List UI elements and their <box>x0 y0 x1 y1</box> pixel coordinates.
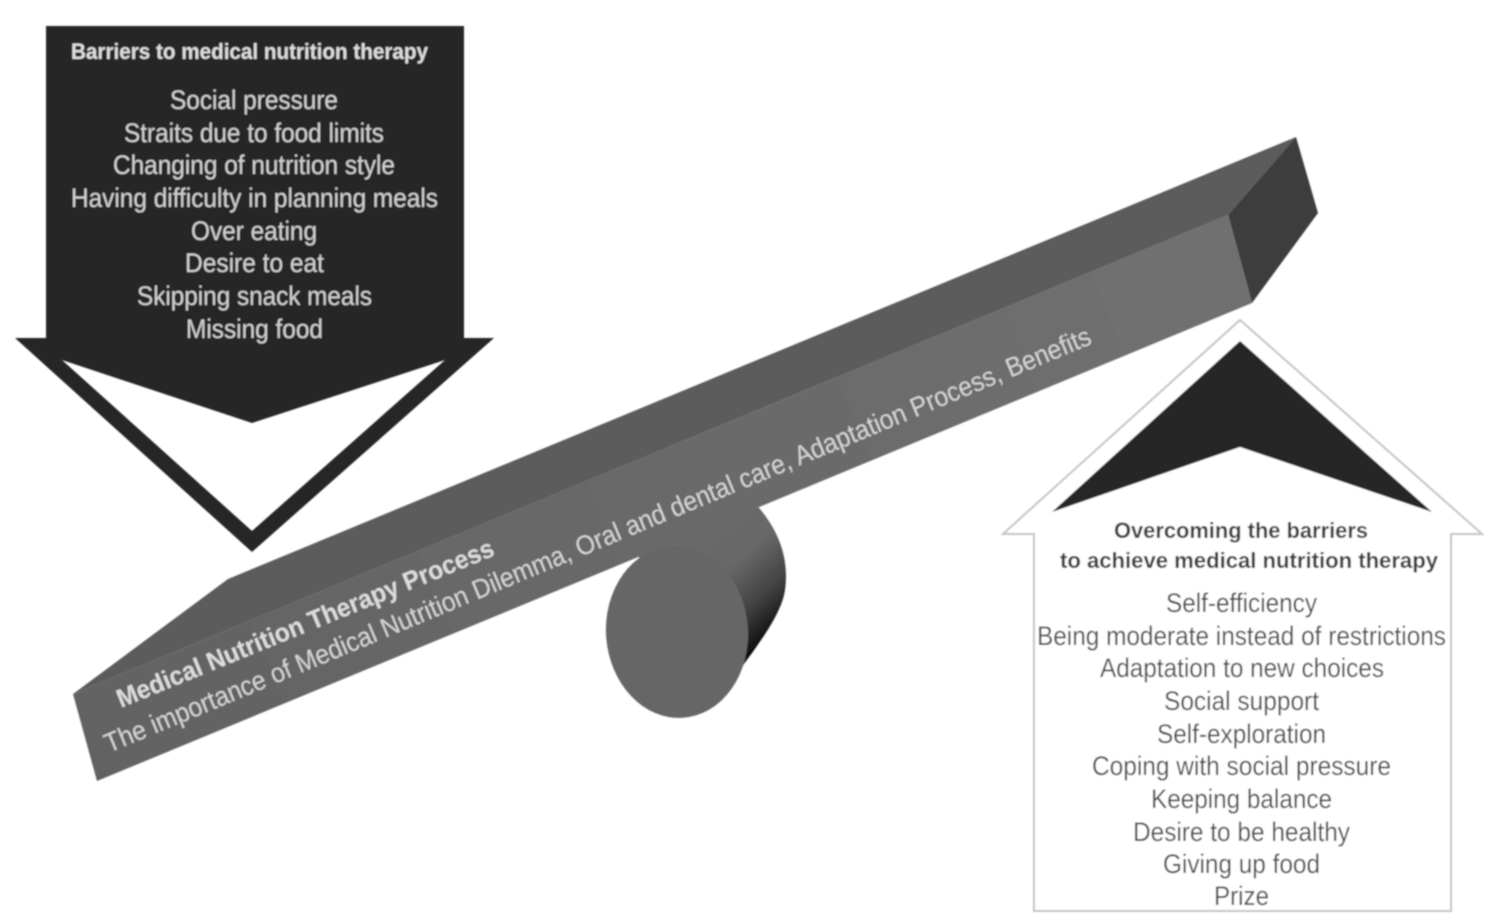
list: barriers: Skipping snack meals <box>137 281 372 311</box>
list: overcoming: Adaptation to new choices <box>1100 653 1384 683</box>
list: overcoming: Prize <box>1214 881 1269 911</box>
beam subtitle: The importance of Medical Nutrition Dilemma, Oral and dental care, Adaptation Process, Benefits <box>100 321 1095 759</box>
list: barriers: Social pressure <box>170 85 338 115</box>
panel: barriers down arrow <box>15 26 494 552</box>
list: barriers <box>71 85 438 344</box>
list: barriers: Having difficulty in planning meals <box>71 183 438 213</box>
list: overcoming <box>1037 588 1446 911</box>
beam title: Medical Nutrition Therapy Process <box>112 533 498 714</box>
dark arrow head <box>1052 341 1432 512</box>
list: barriers: Missing food <box>186 314 323 344</box>
icon: cylinder fulcrum <box>600 500 786 723</box>
beam top face <box>73 137 1296 694</box>
panel: overcoming the barriers up arrow <box>1003 320 1482 911</box>
list: barriers: Changing of nutrition style <box>113 150 395 180</box>
beam front face <box>73 215 1252 781</box>
list: overcoming: Giving up food <box>1163 849 1320 879</box>
list: barriers: Straits due to food limits <box>124 118 384 148</box>
heading: barriers: Barriers to medical nutrition therapy <box>71 39 429 64</box>
beam: seesaw plank <box>73 137 1318 781</box>
arrow shape <box>15 26 494 552</box>
heading: overcoming: to achieve medical nutrition therapy <box>1060 548 1439 573</box>
list: overcoming: Self-efficiency <box>1166 588 1317 618</box>
list: overcoming: Coping with social pressure <box>1092 751 1391 781</box>
beam end face <box>1228 137 1318 303</box>
list: overcoming: Keeping balance <box>1151 784 1332 814</box>
heading: overcoming: Overcoming the barriers <box>1114 518 1368 543</box>
list: overcoming: Being moderate instead of restrictions <box>1037 621 1446 651</box>
heading: overcoming <box>1060 518 1439 573</box>
list: overcoming: Desire to be healthy <box>1133 817 1350 847</box>
list: barriers: Over eating <box>191 216 317 246</box>
house-shaped outline <box>1003 320 1482 911</box>
list: barriers: Desire to eat <box>185 248 324 278</box>
list: overcoming: Social support <box>1164 686 1319 716</box>
list: overcoming: Self-exploration <box>1157 719 1326 749</box>
